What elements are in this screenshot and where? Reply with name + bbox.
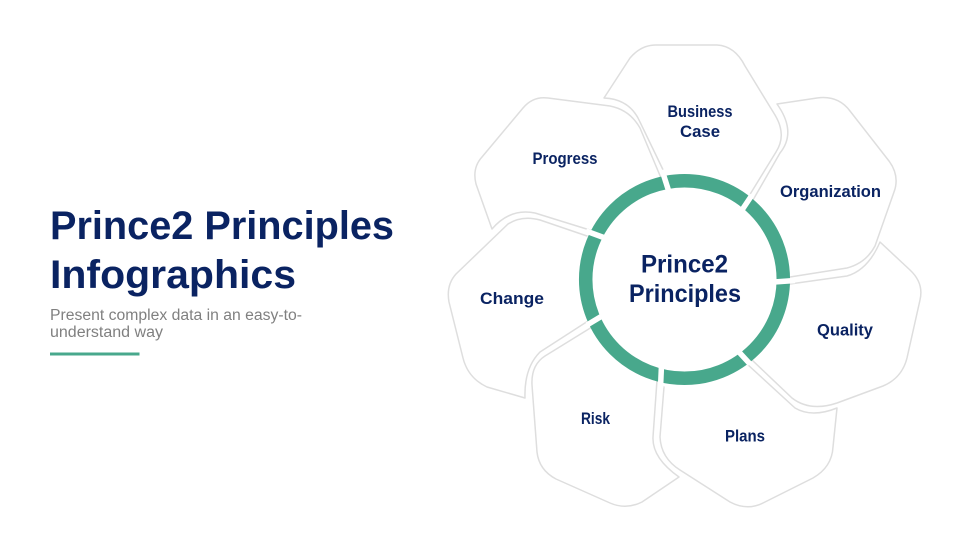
title: [50, 204, 394, 297]
label: risk: Risk: [581, 410, 611, 428]
subtitle: [50, 307, 302, 341]
label: progress: Progress: [532, 150, 598, 168]
petal: quality: [752, 242, 921, 407]
label: plans: Plans: [725, 428, 765, 446]
petal: plans: [660, 364, 837, 507]
label: business case: Business: [668, 103, 732, 121]
subtitle: Present complex data in an easy-to-: [50, 307, 302, 324]
petal: organization: [753, 98, 896, 277]
title: Prince2 Principles: [50, 204, 394, 248]
centre label: Principles: [629, 280, 741, 308]
centre label: Prince2: [641, 250, 728, 278]
label: change: Change: [480, 290, 544, 308]
petal: business case: [604, 45, 781, 196]
label: organization: Organization: [780, 183, 881, 201]
label: business case: Case: [680, 123, 720, 141]
petal: progress: [475, 98, 661, 231]
subtitle: understand way: [50, 324, 163, 341]
label: business case: [668, 103, 732, 141]
title: Infographics: [50, 253, 296, 297]
accent underline: [50, 352, 140, 356]
centre label: [629, 250, 741, 308]
centre ring: [586, 170, 795, 388]
label: quality: Quality: [817, 322, 874, 340]
petal: risk: [532, 327, 679, 506]
petal: change: [448, 218, 588, 398]
